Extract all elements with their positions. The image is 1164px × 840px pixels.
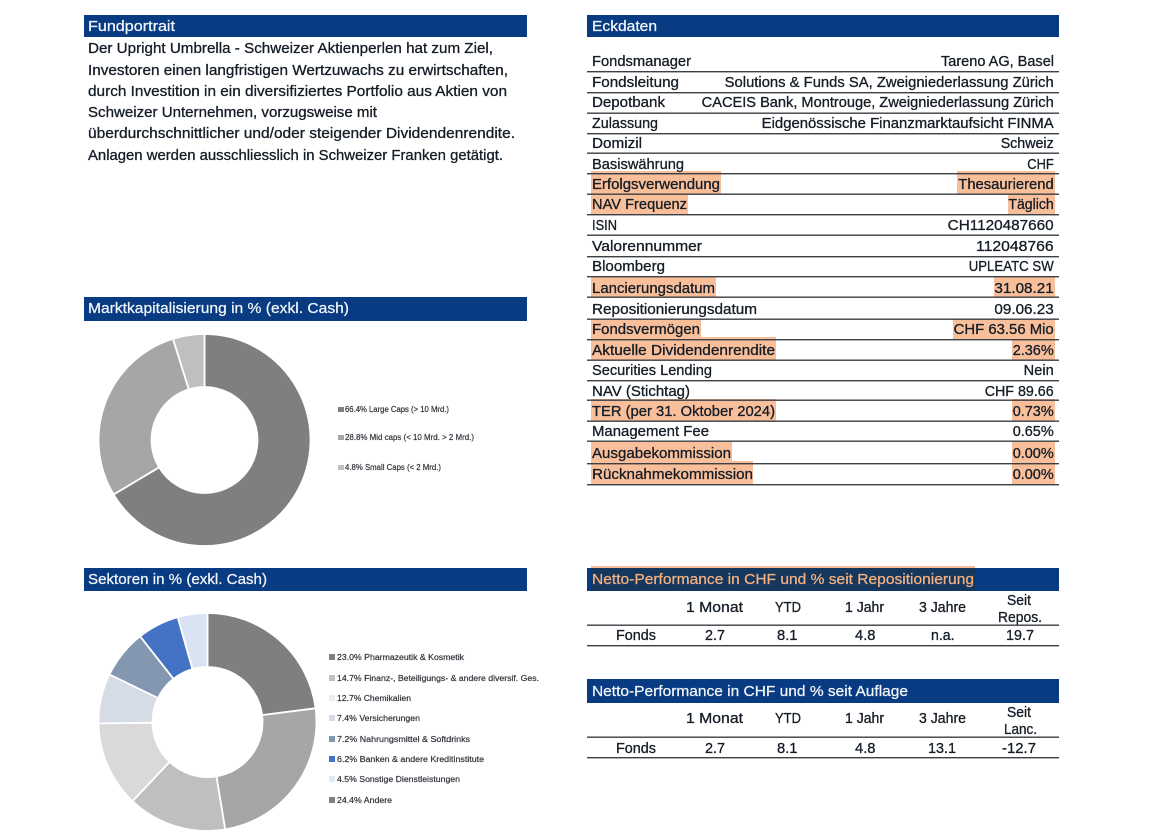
performance table: repositioning: YTD [775, 600, 801, 616]
labels column: Fondsmanager [592, 54, 691, 70]
values column: Nein [1024, 363, 1054, 379]
values column: UPLEATC SW [969, 259, 1054, 275]
text block: fund description: Der Upright Umbrella - Schweizer Aktienperlen hat zum Ziel, [88, 41, 493, 57]
heading: performance since repositioning [587, 566, 1059, 591]
performance table: launch: 4.8 [855, 741, 876, 757]
values column: 0.00% [1013, 446, 1054, 462]
labels column: Zulassung [592, 116, 658, 132]
performance table: repositioning [587, 593, 1059, 646]
values column: 31.08.21 [994, 281, 1054, 297]
panel: Fundportrait [84, 15, 527, 164]
performance table: repositioning: 8.1 [777, 628, 798, 644]
values column: 112048766 [976, 239, 1054, 255]
panel: Marktkapitalisierung [84, 297, 527, 546]
values column: CHF 63.56 Mio [954, 322, 1054, 338]
values column: CH1120487660 [948, 218, 1054, 234]
panel: performance since repositioning [587, 566, 1059, 646]
text block: fund description: Investoren einen langfristigen Wertzuwachs zu erwirtschaften, [88, 63, 508, 79]
labels column: Bloomberg [592, 259, 665, 275]
rule lines [587, 71, 1059, 485]
performance table: repositioning: Seit [1007, 593, 1031, 609]
legend: market cap: 4.8% Small Caps (< 2 Mrd.) [345, 463, 441, 472]
labels column: NAV (Stichtag) [592, 384, 690, 400]
labels column: Depotbank [592, 95, 666, 111]
values column: 0.65% [1013, 424, 1054, 440]
heading: Eckdaten [587, 15, 1059, 37]
donut chart: market cap [99, 334, 311, 546]
legend: sectors: 14.7% Finanz-, Beteiligungs- & andere diversif. Ges. [337, 674, 539, 683]
labels column: Fondsvermögen [592, 322, 700, 338]
legend: sectors: 6.2% Banken & andere Kreditinstitute [337, 755, 485, 764]
performance table: launch: 8.1 [777, 741, 798, 757]
values column: Thesaurierend [958, 177, 1054, 193]
heading: Sektoren [84, 568, 527, 591]
labels column: Domizil [592, 136, 642, 152]
heading: performance since launch [587, 679, 1059, 703]
heading: Marktkapitalisierung [84, 297, 527, 321]
values column: Solutions & Funds SA, Zweigniederlassung Zürich [725, 75, 1054, 91]
heading: performance since repositioning: Netto-Performance in CHF und % seit Repositionierung [592, 571, 974, 588]
labels column: NAV Frequenz [592, 197, 687, 213]
labels column [592, 54, 775, 483]
performance table: launch: Fonds [616, 741, 656, 757]
performance table: launch: -12.7 [1002, 741, 1036, 757]
values column: CACEIS Bank, Montrouge, Zweigniederlassung Zürich [702, 95, 1054, 111]
legend: sectors: 24.4% Andere [337, 796, 393, 805]
performance table: launch: 2.7 [705, 741, 725, 757]
legend: sectors: 23.0% Pharmazeutik & Kosmetik [337, 653, 465, 662]
text block: fund description: Anlagen werden ausschliesslich in Schweizer Franken getätigt. [88, 148, 503, 164]
performance table: repositioning: Fonds [616, 628, 656, 644]
heading: Eckdaten: Eckdaten [592, 18, 657, 35]
performance table: repositioning: 1 Monat [686, 600, 743, 616]
text block: fund description [88, 41, 515, 164]
values column: Tareno AG, Basel [941, 54, 1054, 70]
performance table: launch: 3 Jahre [919, 711, 966, 727]
labels column: Valorennummer [592, 239, 702, 255]
values column: Täglich [1008, 197, 1054, 213]
labels column: Lancierungsdatum [592, 281, 715, 297]
values column: 09.06.23 [994, 302, 1054, 318]
performance table: repositioning: 4.8 [855, 628, 876, 644]
labels column: Fondsleitung [592, 75, 679, 91]
panel: Eckdaten [587, 15, 1059, 485]
labels column: Erfolgsverwendung [592, 177, 720, 193]
values column: 2.36% [1013, 343, 1054, 359]
labels column: ISIN [592, 218, 617, 234]
performance table: launch: 1 Jahr [845, 711, 884, 727]
performance table: launch: YTD [775, 711, 801, 727]
legend: sectors [329, 653, 539, 805]
text block: fund description: durch Investition in ein diversifiziertes Portfolio aus Aktien von [88, 84, 507, 100]
performance table: repositioning: n.a. [931, 628, 954, 644]
performance table: launch: Lanc. [1004, 722, 1037, 738]
heading: Sektoren: Sektoren in % (exkl. Cash) [88, 571, 267, 588]
labels column: Aktuelle Dividendenrendite [592, 343, 775, 359]
heading: Marktkapitalisierung: Marktkapitalisierung in % (exkl. Cash) [88, 300, 349, 317]
performance table: repositioning: 19.7 [1006, 628, 1034, 644]
highlights: orange text backgrounds [591, 171, 1055, 484]
key data table [587, 54, 1059, 485]
values column: Schweiz [1001, 136, 1054, 152]
heading: performance since launch: Netto-Performance in CHF und % seit Auflage [592, 683, 908, 700]
legend: sectors: 7.2% Nahrungsmittel & Softdrinks [337, 735, 470, 744]
performance table: launch [587, 705, 1059, 758]
legend: sectors: 12.7% Chemikalien [337, 694, 411, 703]
performance table: repositioning: Repos. [998, 610, 1042, 626]
values column: CHF 89.66 [985, 384, 1054, 400]
heading: Fundportrait: Fundportrait [88, 18, 176, 35]
performance table: launch: Seit [1007, 705, 1031, 721]
donut chart: sectors [98, 613, 316, 831]
text block: fund description: Schweizer Unternehmen, vorzugsweise mit [88, 105, 377, 121]
performance table: launch: 1 Monat [686, 711, 743, 727]
legend: market cap [338, 405, 474, 472]
performance table: repositioning: 2.7 [705, 628, 725, 644]
labels column: Basiswährung [592, 157, 684, 173]
panel: Sektoren [84, 568, 539, 831]
labels column: Management Fee [592, 424, 709, 440]
performance table: repositioning: 3 Jahre [919, 600, 966, 616]
labels column: Repositionierungsdatum [592, 302, 757, 318]
panel: performance since launch [587, 679, 1059, 758]
heading: Fundportrait [84, 15, 527, 37]
values column: CHF [1027, 157, 1054, 173]
legend: market cap: 28.8% Mid caps (< 10 Mrd. > 2 Mrd.) [345, 433, 474, 442]
values column: Eidgenössische Finanzmarktaufsicht FINMA [762, 116, 1054, 132]
legend: market cap: 66.4% Large Caps (> 10 Mrd.) [345, 405, 449, 414]
performance table: repositioning: 1 Jahr [845, 600, 884, 616]
labels column: Ausgabekommission [592, 446, 731, 462]
text block: fund description: überdurchschnittlicher und/oder steigender Dividendenrendite. [88, 126, 515, 142]
labels column: Securities Lending [592, 363, 712, 379]
labels column: Rücknahmekommission [592, 467, 753, 483]
values column: 0.73% [1013, 404, 1054, 420]
values column [702, 54, 1054, 483]
performance table: launch: 13.1 [928, 741, 956, 757]
labels column: TER (per 31. Oktober 2024) [592, 404, 775, 420]
legend: sectors: 7.4% Versicherungen [337, 714, 420, 723]
legend: sectors: 4.5% Sonstige Dienstleistungen [337, 775, 460, 784]
values column: 0.00% [1013, 467, 1054, 483]
